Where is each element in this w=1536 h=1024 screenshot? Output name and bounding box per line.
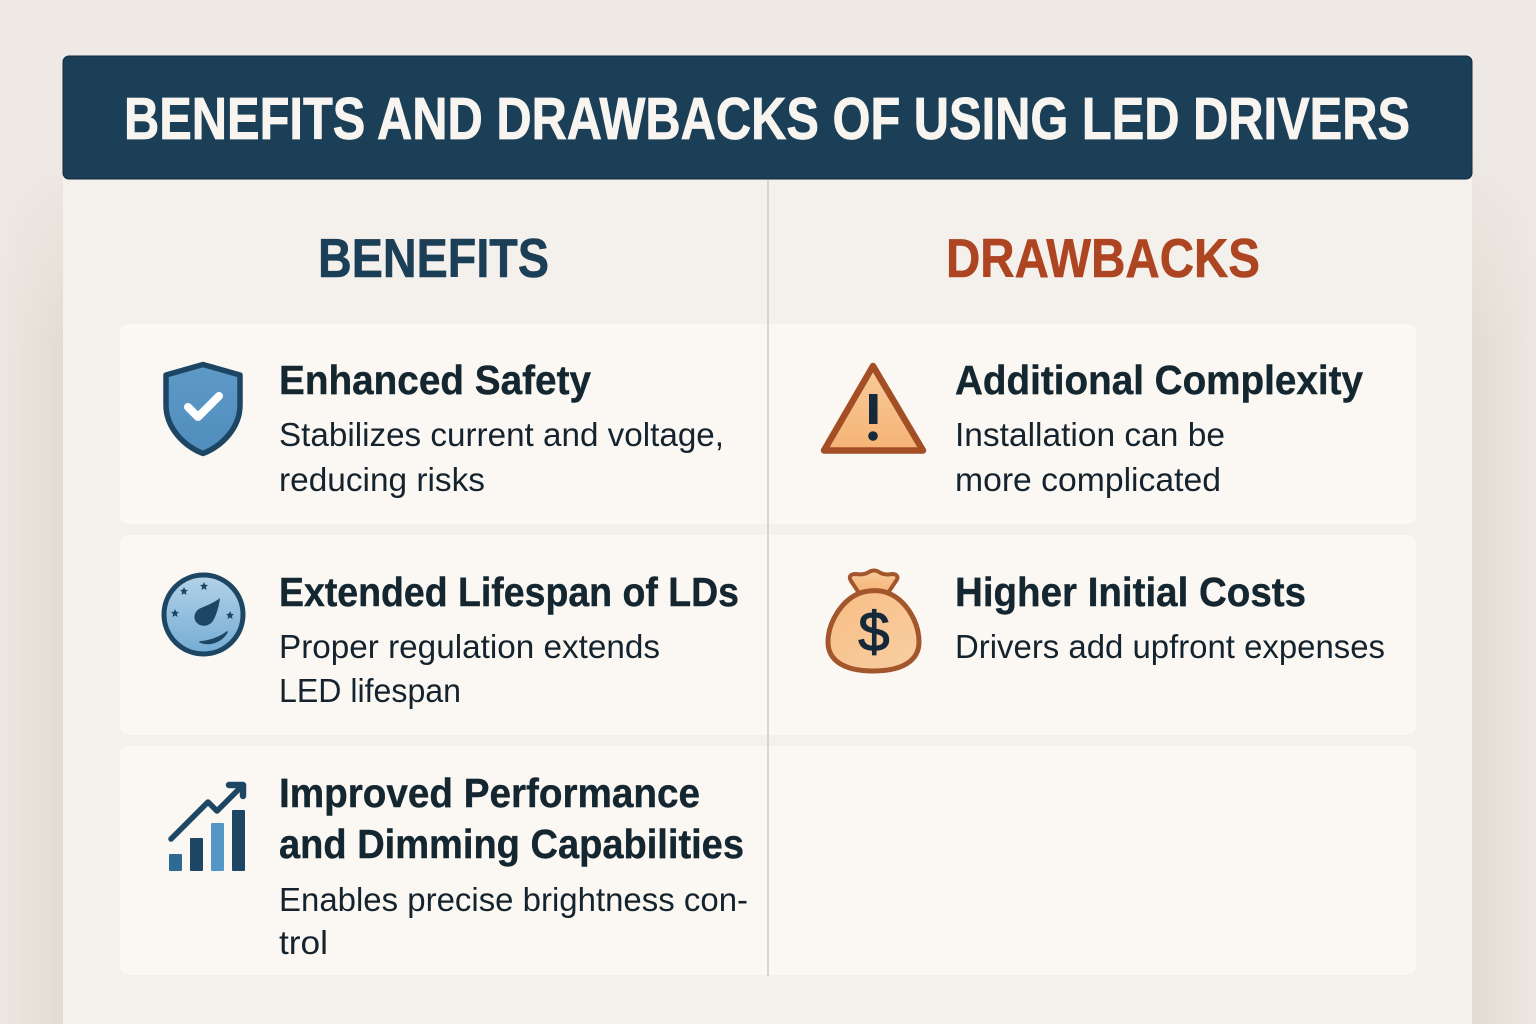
text: extended lifespan description: Proper regulation extends <box>279 628 660 665</box>
panel: row 2 card <box>120 535 1416 735</box>
text: enhanced safety description: Stabilizes current and voltage, <box>279 416 724 453</box>
text: extended lifespan heading: Extended Lifespan of LDs <box>279 569 739 615</box>
text: improved performance heading line 2: and Dimming Capabilities <box>279 821 744 867</box>
heading: drawbacks: DRAWBACKS <box>946 227 1260 289</box>
benefit: enhanced safety <box>166 357 724 498</box>
text: additional complexity description: Installation can be <box>955 416 1225 453</box>
text: additional complexity description line 2: more complicated <box>955 461 1221 498</box>
icon: gauge <box>164 575 243 654</box>
panel: main sheet <box>63 150 1472 1024</box>
panel: benefits row 1 card <box>120 324 1416 524</box>
benefit: improved performance <box>169 770 748 961</box>
icon: rising bar chart <box>169 785 245 871</box>
text: improved performance description line 2: trol <box>279 924 328 961</box>
panel: row 3 card <box>120 746 1416 975</box>
drawback: additional complexity <box>824 357 1363 498</box>
benefit: extended lifespan <box>164 569 739 709</box>
text: additional complexity heading: Additional Complexity <box>955 357 1363 403</box>
text: improved performance heading: Improved Performance <box>279 770 700 816</box>
icon: shield with check <box>166 364 240 454</box>
drawback: higher initial costs <box>828 569 1385 671</box>
icon: money bag <box>828 570 919 671</box>
text: extended lifespan description line 2: LED lifespan <box>279 672 461 709</box>
title banner <box>63 56 1472 179</box>
text: higher initial costs description: Drivers add upfront expenses <box>955 628 1385 665</box>
column divider <box>767 180 769 976</box>
text: improved performance description: Enables precise brightness con- <box>279 881 748 918</box>
heading: benefits: BENEFITS <box>318 227 549 289</box>
icon: warning triangle <box>824 366 923 450</box>
text: enhanced safety heading: Enhanced Safety <box>279 357 591 403</box>
text: enhanced safety description line 2: reducing risks <box>279 461 485 498</box>
icon: dollar sign: $ <box>858 600 890 663</box>
text: higher initial costs heading: Higher Initial Costs <box>955 569 1306 615</box>
